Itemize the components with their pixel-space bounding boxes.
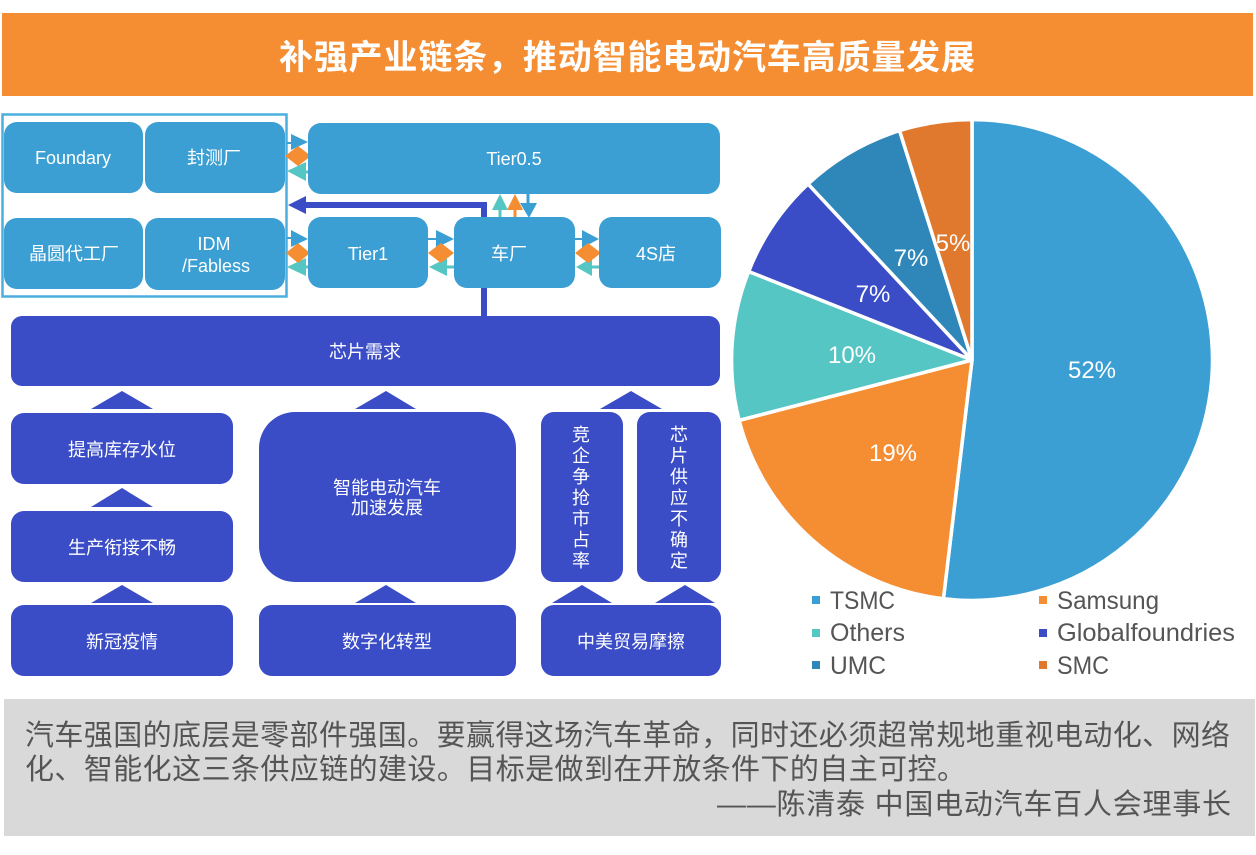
box: competitors grabbing market share [541,412,623,582]
box: chip supply uncertainty: 定 [670,551,688,571]
arrows: chip makers and Tier1 [286,230,310,276]
box: IDM / Fabless: IDM [198,234,230,254]
box: smart EV acceleration: 智能电动汽车 [333,478,441,498]
triangles: upward flow arrows [91,391,715,603]
box: chip demand [11,316,720,386]
legend: UMC [830,652,886,680]
box: competitors grabbing market share: 占 [572,530,590,550]
quote panel: ——陈清泰 中国电动汽车百人会理事长 [717,788,1231,821]
box: US-China trade friction [541,605,721,676]
box: competitors grabbing market share: 争 [572,467,590,487]
box: packaging and test plant: 封测厂 [187,148,241,168]
box: 4S store [599,217,721,288]
box: competitors grabbing market share: 市 [572,509,590,529]
box: chip supply uncertainty [637,412,721,582]
pie value labels: 19% [869,440,917,467]
arrows: car maker and Tier0.5 [492,194,537,218]
arrows: Tier1 and car maker [428,230,454,276]
box: competitors grabbing market share: 率 [572,551,590,571]
box: raise inventory level: 提高库存水位 [68,440,176,460]
box: smart EV acceleration: 加速发展 [351,498,423,518]
box: chip supply uncertainty: 应 [670,488,688,508]
box: car maker [454,217,575,288]
panel: supply chain diagram [2,114,721,676]
pie chart: market share [732,120,1212,600]
box: packaging and test plant [145,122,285,193]
box: smart EV acceleration [259,412,516,582]
box: Tier0.5: Tier0.5 [486,149,542,169]
legend: Samsung [1057,587,1159,615]
box: 4S store: 4S店 [636,244,676,264]
pie value labels: 5% [936,230,970,257]
legend: SMC [1057,652,1109,680]
box: poor production connection [11,511,233,582]
box: Tier1: Tier1 [348,244,388,264]
box: chip supply uncertainty: 芯 [670,425,688,445]
legend: Globalfoundries [1057,619,1235,647]
quote panel [4,699,1255,836]
box: chip supply uncertainty: 确 [670,530,688,550]
frame: chip makers group [2,114,286,296]
quote panel: 汽车强国的底层是零部件强国。要赢得这场汽车革命，同时还必须超常规地重视电动化、网络 [25,719,1230,752]
box: competitors grabbing market share: 企 [572,446,590,466]
box: chip supply uncertainty: 供 [670,467,688,487]
pie value labels: 52% [1068,357,1116,384]
box: digital transformation: 数字化转型 [342,632,432,652]
box: chip supply uncertainty: 片 [670,446,688,466]
legend: TSMC [830,587,895,615]
pie value labels: 7% [894,245,928,272]
box: competitors grabbing market share: 抢 [572,488,590,508]
box: IDM / Fabless: /Fabless [182,256,250,276]
box: chip supply uncertainty: 不 [670,509,688,529]
arrow: demand line to chip makers [288,196,484,316]
box: wafer foundry: 晶圆代工厂 [29,244,119,264]
box: wafer foundry [4,218,143,289]
box: US-China trade friction: 中美贸易摩擦 [577,632,685,652]
box: COVID epidemic: 新冠疫情 [86,632,158,652]
box: chip demand: 芯片需求 [329,342,401,362]
arrows: chip makers and Tier0.5 [285,134,311,181]
box: COVID epidemic [11,605,233,676]
box: competitors grabbing market share: 竞 [572,425,590,445]
box: raise inventory level [11,413,233,484]
legend: Others [830,619,905,647]
box: Tier1 [308,217,428,288]
title banner [2,13,1253,96]
box: Foundary [4,122,143,193]
title banner: 补强产业链条，推动智能电动汽车高质量发展 [279,39,975,77]
arrows: car maker and 4S store [575,230,601,276]
box: car maker: 车厂 [491,244,527,264]
legend [812,587,1235,680]
pie value labels: 10% [828,342,876,369]
box: poor production connection: 生产衔接不畅 [68,538,176,558]
box: Tier0.5 [308,123,720,194]
box: Foundary: Foundary [35,148,111,168]
pie value labels: 7% [856,281,890,308]
box: IDM / Fabless [145,218,285,290]
pie value labels [828,230,1116,467]
box: digital transformation [259,605,516,676]
quote panel: 化、智能化这三条供应链的建设。目标是做到在开放条件下的自主可控。 [25,753,966,786]
